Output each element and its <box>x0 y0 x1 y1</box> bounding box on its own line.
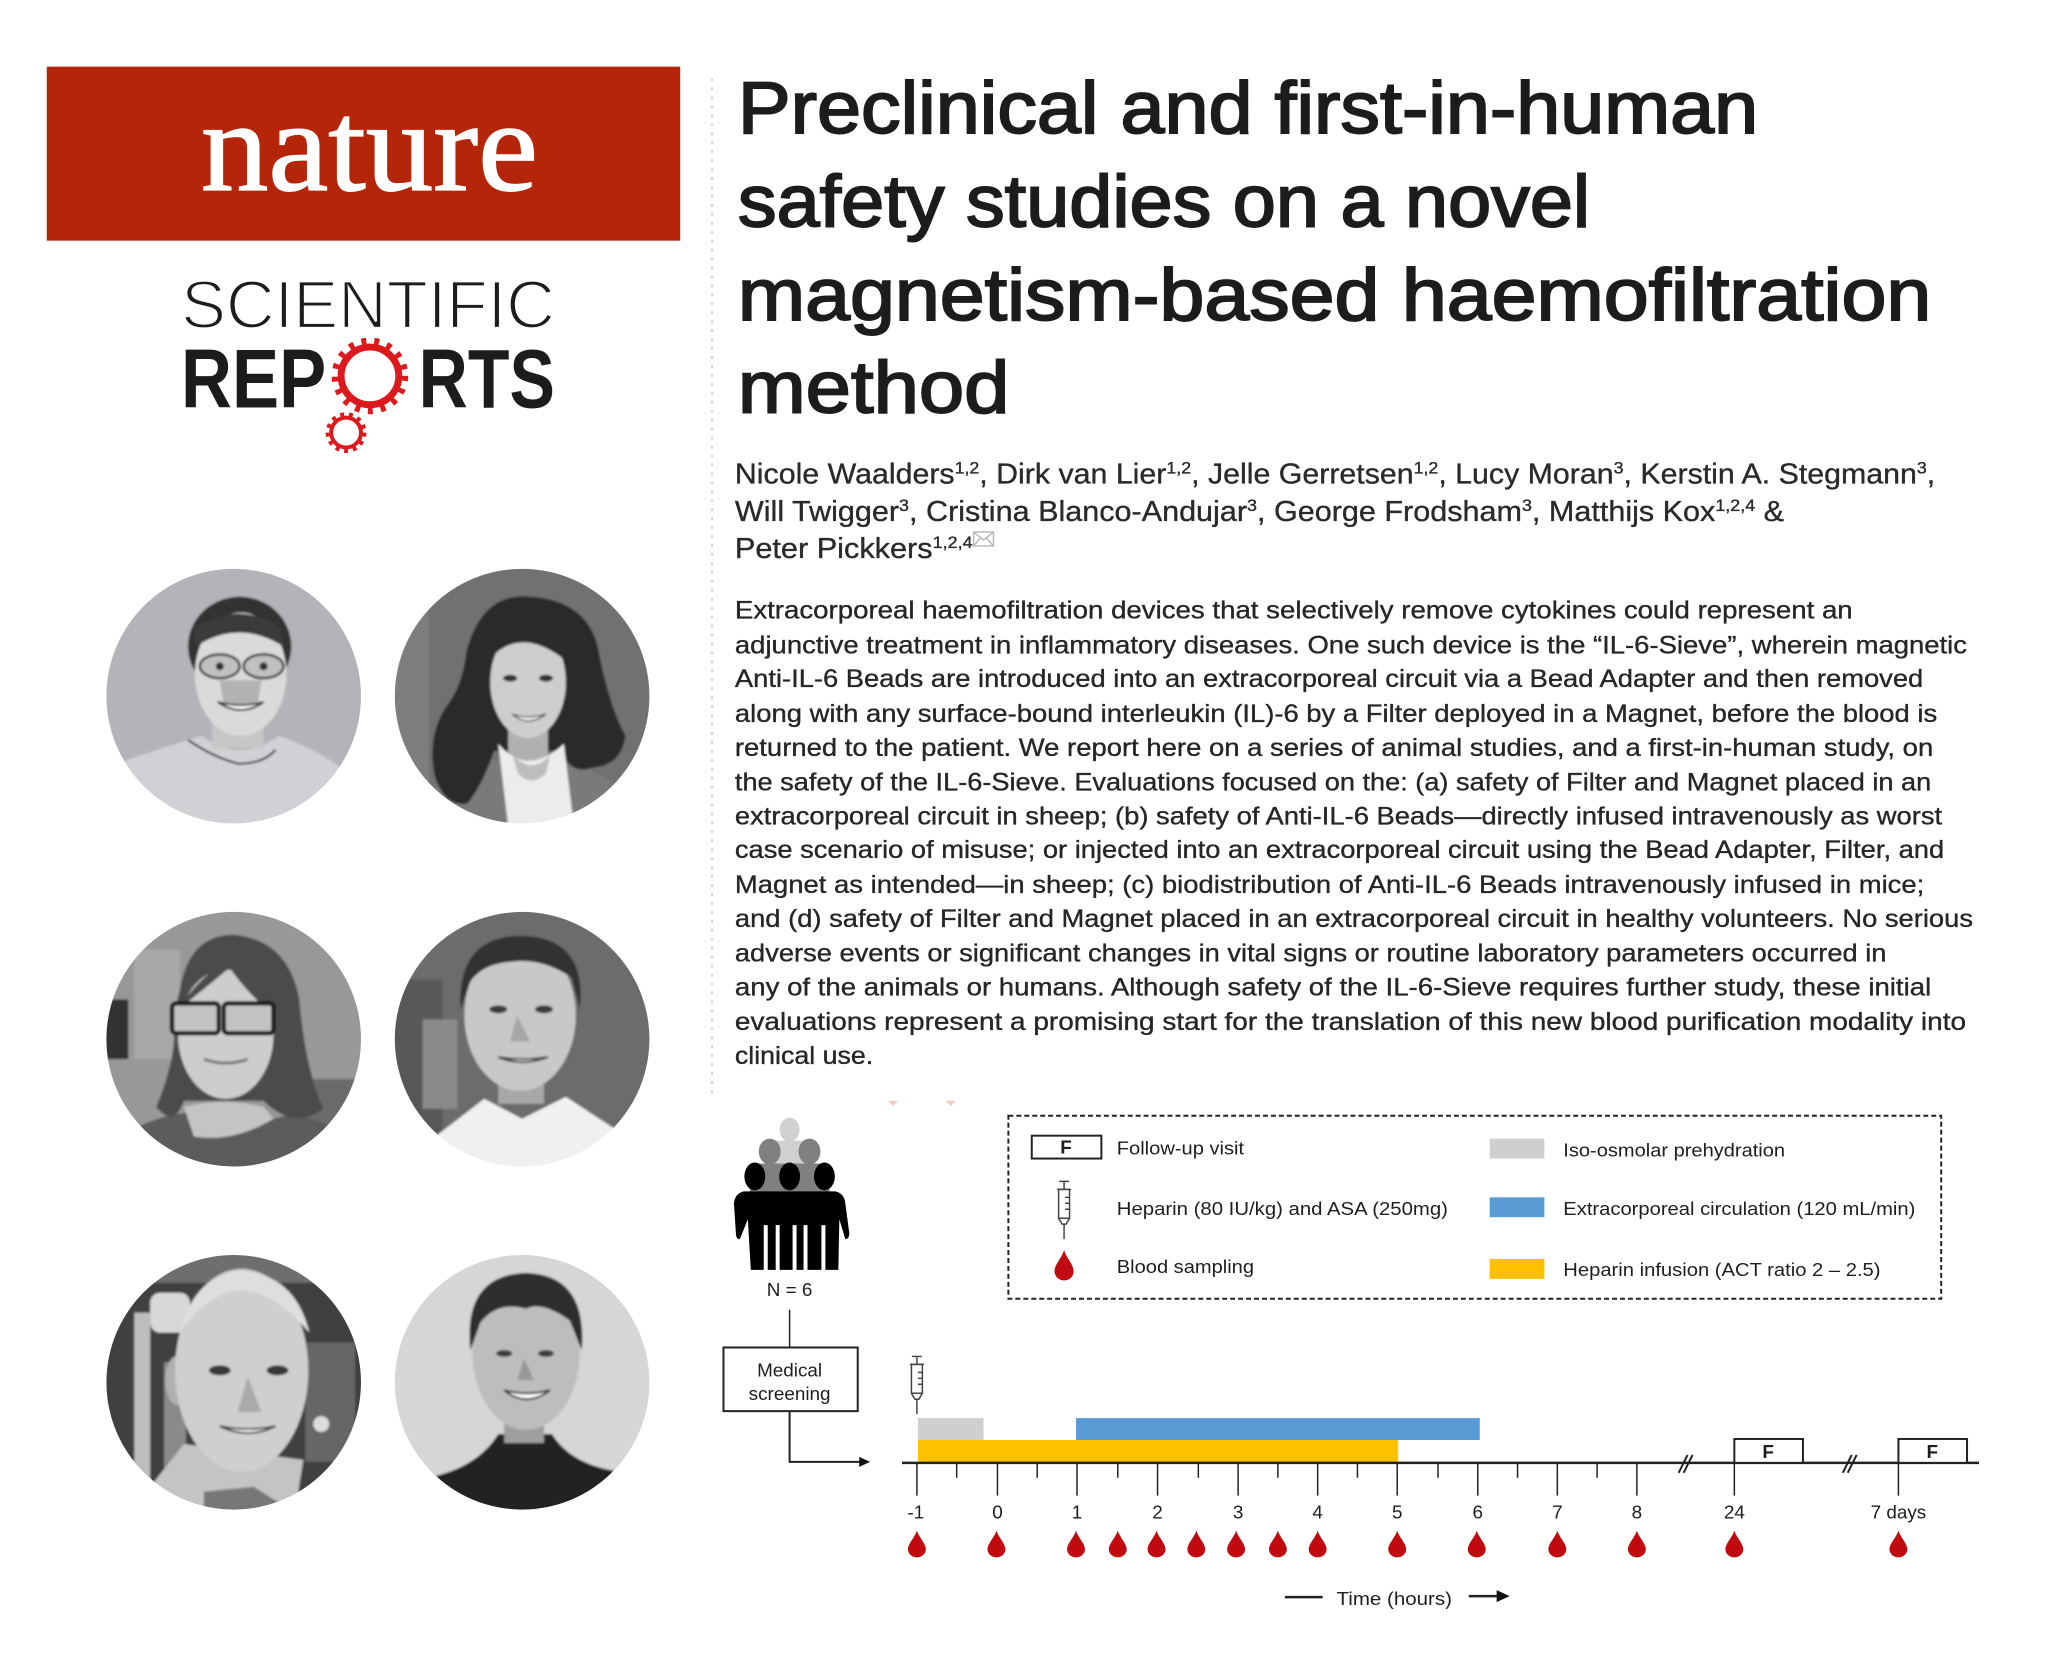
portrait: author two <box>393 567 651 825</box>
abstract text: Magnet as intended—in sheep; (c) biodistribution of Anti-IL-6 Beads intravenously infused in mice; <box>735 871 1924 899</box>
axis labels: 0 <box>992 1503 1003 1524</box>
axis labels: 1 <box>1072 1503 1082 1524</box>
authors: 1,2 <box>955 458 979 477</box>
axis labels: 8 <box>1632 1503 1642 1524</box>
abstract text: Anti-IL-6 Beads are introduced into an extracorporeal circuit via a Bead Adapter and then removed <box>735 665 1923 693</box>
follow-up box: 7 days <box>1898 1439 1967 1463</box>
bar: heparin infusion <box>918 1440 1398 1462</box>
axis labels: 4 <box>1312 1503 1323 1524</box>
axis title: time in hours with arrow <box>1285 1589 1510 1610</box>
axis labels: -1 <box>908 1503 924 1524</box>
legend: follow-up visit <box>1032 1136 1245 1160</box>
title: magnetism-based haemofiltration <box>738 253 1931 336</box>
abstract text: the safety of the IL-6-Sieve. Evaluations focused on the: (a) safety of Filter and Magnet placed in an <box>735 769 1931 797</box>
portrait: author three <box>104 910 363 1168</box>
portrait: author one <box>104 567 363 825</box>
authors: 1,2,4 <box>933 533 973 552</box>
authors: & <box>1755 496 1784 528</box>
abstract text: any of the animals or humans. Although safety of the IL-6-Sieve requires further study, these initial <box>735 973 1931 1001</box>
axis labels: 5 <box>1392 1503 1402 1524</box>
abstract text: Extracorporeal haemofiltration devices that selectively remove cytokines could represent an <box>735 597 1853 625</box>
abstract text: adverse events or significant changes in vital signs or routine laboratory parameters occurred in <box>735 940 1886 968</box>
abstract text <box>735 597 1973 1070</box>
legend: heparin infusion: Heparin infusion (ACT ratio 2 – 2.5) <box>1563 1260 1881 1281</box>
wordmark: scientific: SCIENTIFIC <box>181 268 555 343</box>
portrait: author four <box>393 910 651 1178</box>
authors: , <box>1927 458 1935 490</box>
follow-up box: 7 days: F <box>1926 1442 1938 1463</box>
authors: 3 <box>1614 458 1624 477</box>
icon: group of participants <box>734 1118 849 1270</box>
abstract text: evaluations represent a promising start for the translation of this new blood purification modality into <box>735 1008 1966 1036</box>
authors: Will Twigger <box>735 496 890 528</box>
authors: , Matthijs Kox <box>1532 496 1716 528</box>
legend: prehydration <box>1490 1139 1785 1162</box>
panel: Scientific Reports logo <box>181 268 555 451</box>
legend: prehydration: Iso-osmolar prehydration <box>1563 1141 1785 1162</box>
flow connector: N to screening <box>789 1310 791 1347</box>
authors: Nicole Waalders <box>735 458 944 490</box>
authors: , Jelle Gerretsen <box>1191 458 1414 490</box>
title <box>738 66 1931 429</box>
wordmark: rep: REP <box>181 332 326 426</box>
title: safety studies on a novel <box>738 160 1590 243</box>
box: medical screening: Medical <box>757 1360 822 1381</box>
vertical dotted divider <box>711 79 713 1097</box>
legend: follow-up visit: F <box>1060 1138 1072 1159</box>
authors: 3 <box>1522 496 1532 515</box>
legend: blood sampling <box>1055 1250 1254 1280</box>
axis title: time in hours with arrow: Time (hours) <box>1337 1589 1452 1610</box>
authors: , Dirk van Lier <box>979 458 1167 490</box>
legend: heparin and ASA: Heparin (80 IU/kg) and ASA (250mg) <box>1117 1199 1448 1220</box>
arrow: screening to timeline <box>790 1411 870 1467</box>
bar: iso-osmolar prehydration <box>918 1418 984 1440</box>
authors: , Kerstin A. Stegmann <box>1624 458 1917 490</box>
title: Preclinical and first-in-human <box>738 66 1758 149</box>
portrait: author five <box>104 1253 363 1512</box>
legend: heparin and ASA <box>1057 1181 1448 1239</box>
panel: nature logo <box>47 67 680 241</box>
axis labels: 7 <box>1552 1503 1563 1524</box>
authors: 1,2 <box>1414 458 1438 477</box>
authors: Peter Pickkers <box>735 533 921 565</box>
nature wordmark: nature <box>201 75 538 218</box>
decorative pink marks <box>888 1101 956 1106</box>
authors: 3 <box>1917 458 1927 477</box>
authors <box>735 458 1935 565</box>
follow-up box: 24 hours: F <box>1762 1442 1774 1463</box>
authors: 3 <box>1247 496 1257 515</box>
abstract text: and (d) safety of Filter and Magnet placed in an extracorporeal circuit in healthy volunteers. No serious <box>735 905 1973 933</box>
icon: syringe on timeline <box>910 1356 924 1414</box>
follow-up box: 24 hours <box>1734 1439 1803 1463</box>
icon: small gear <box>328 414 364 451</box>
axis labels <box>908 1503 1926 1524</box>
icon: large gear <box>335 341 405 411</box>
legend: extracorporeal circulation: Extracorporeal circulation (120 mL/min) <box>1563 1199 1915 1220</box>
label: N = 6: N = 6 <box>767 1280 812 1301</box>
icon: envelope <box>974 532 993 546</box>
legend: blood sampling: Blood sampling <box>1117 1257 1254 1278</box>
authors: , Lucy Moran <box>1438 458 1614 490</box>
authors: , Cristina Blanco-Andujar <box>909 496 1247 528</box>
box: medical screening: screening <box>749 1384 831 1405</box>
legend box <box>1008 1116 1941 1299</box>
axis labels: 3 <box>1233 1503 1243 1524</box>
abstract text: extracorporeal circuit in sheep; (b) safety of Anti-IL-6 Beads—directly infused intravenously as worst <box>735 802 1942 830</box>
authors: 1,2 <box>1166 458 1191 477</box>
axis labels: 24 <box>1724 1503 1745 1524</box>
axis labels: 2 <box>1152 1503 1163 1524</box>
legend: follow-up visit: Follow-up visit <box>1117 1139 1245 1160</box>
abstract text: along with any surface-bound interleukin (IL)-6 by a Filter deployed in a Magnet, before the blood is <box>735 700 1937 728</box>
portrait: author six <box>393 1253 651 1512</box>
axis labels: 7 days <box>1871 1503 1926 1524</box>
abstract text: case scenario of misuse; or injected into an extracorporeal circuit using the Bead Adapter, Filter, and <box>735 836 1944 864</box>
authors: 1,2,4 <box>1715 496 1755 515</box>
abstract text: returned to the patient. We report here on a series of animal studies, and a first-in-human study, on <box>735 734 1933 762</box>
axis labels: 6 <box>1473 1503 1483 1524</box>
bar: extracorporeal circulation <box>1076 1418 1480 1440</box>
box: medical screening <box>723 1347 858 1411</box>
abstract text: clinical use. <box>735 1042 873 1070</box>
title: method <box>738 346 1009 429</box>
wordmark: rts: RTS <box>419 332 555 426</box>
authors: 3 <box>899 496 909 515</box>
authors: , George Frodsham <box>1257 496 1522 528</box>
abstract text: adjunctive treatment in inflammatory diseases. One such device is the “IL-6-Sieve”, wherein magnetic <box>735 631 1967 659</box>
timeline axis <box>902 1455 1979 1496</box>
blood sampling drops <box>908 1530 1907 1557</box>
